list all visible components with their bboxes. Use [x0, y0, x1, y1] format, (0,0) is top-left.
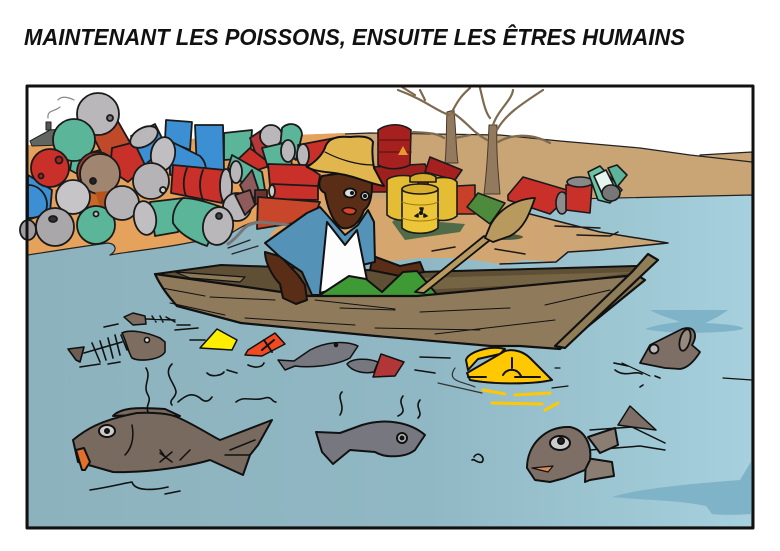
far arm [370, 256, 424, 276]
fish small grey [278, 343, 358, 370]
water [28, 195, 752, 527]
left tree [445, 110, 458, 163]
hat [307, 137, 384, 186]
title: MAINTENANT LES POISSONS, ENSUITE LES ÊTRES HUMAINS [24, 23, 686, 50]
upper grey barrel and red body [92, 118, 132, 160]
shirt [265, 207, 375, 295]
big brown fish [73, 408, 272, 475]
grey swimming fish [316, 422, 425, 464]
fish in red cup [347, 354, 404, 377]
front grey/green barrels [20, 220, 36, 240]
yellow container [200, 329, 237, 350]
right tree [484, 125, 500, 194]
smoking house [30, 97, 74, 146]
boat interior [156, 265, 640, 300]
oar blade shadow [487, 234, 523, 240]
far hills [28, 133, 752, 270]
orange left shore [28, 133, 345, 270]
boat hull [155, 254, 658, 349]
floating debris [200, 329, 285, 356]
puddles [392, 215, 465, 240]
dead trees [398, 87, 550, 194]
back barrels [224, 130, 252, 160]
yellow toxic container [438, 348, 558, 410]
skeleton-tailed fish [527, 406, 665, 482]
barrel pile [20, 93, 336, 247]
stink lines and ripples [80, 324, 752, 494]
oar [415, 198, 535, 293]
blue barrels [165, 120, 192, 150]
trousers [317, 271, 440, 298]
red container [245, 333, 285, 356]
dark water patches [612, 310, 752, 515]
fisherman arm and hand [265, 252, 307, 304]
peninsula [270, 198, 668, 268]
head [319, 172, 372, 228]
sludge stream [228, 222, 290, 244]
comic frame [27, 86, 753, 528]
tank top [320, 222, 367, 293]
orange box barrel [257, 197, 320, 229]
left blue [28, 175, 52, 220]
fisherman [265, 137, 440, 298]
fish skeleton large [68, 331, 165, 362]
panel: polluted lake scene [20, 86, 753, 528]
toxic waste drums [372, 125, 627, 240]
long red barrel [171, 165, 225, 203]
red rows [268, 164, 320, 186]
fish skeleton small [124, 313, 175, 325]
fish floating right [614, 328, 700, 376]
